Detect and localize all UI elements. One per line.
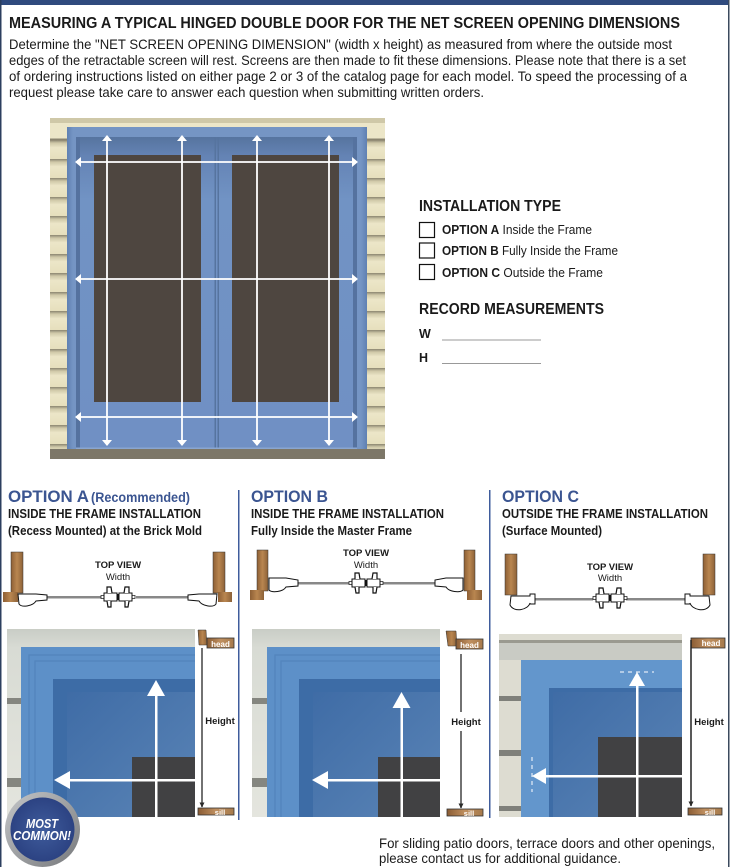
height field — [419, 351, 541, 365]
divider lines — [238, 490, 490, 820]
intro paragraph — [9, 36, 687, 100]
option B height measure: Height — [451, 717, 482, 728]
option B label: OPTION B Fully Inside the Frame — [442, 244, 618, 258]
option A white arrows — [54, 680, 195, 817]
option A height measure: Height — [205, 716, 236, 727]
option C height measure: head — [702, 639, 720, 648]
option B subheading — [251, 507, 444, 538]
option B top view diagram: TOP VIEW — [343, 548, 389, 559]
option C subheading: OUTSIDE THE FRAME INSTALLATION — [502, 507, 708, 521]
option A height measure: sill — [215, 808, 225, 817]
footer note: For sliding patio doors, terrace doors and other openings, — [379, 835, 715, 851]
option B height measure — [446, 631, 483, 818]
option B heading: OPTION B — [251, 488, 328, 506]
option B top view diagram: Width — [354, 560, 378, 571]
badge: most common: MOST — [26, 817, 59, 831]
door panels — [76, 137, 357, 449]
option A heading: OPTION A (Recommended) — [8, 488, 190, 506]
panel: option C — [499, 488, 725, 817]
option C subheading — [502, 507, 708, 538]
width field: W — [419, 327, 431, 341]
checkbox C — [420, 264, 434, 280]
footer note: please contact us for additional guidance. — [379, 850, 621, 866]
option B subheading: Fully Inside the Master Frame — [251, 524, 412, 538]
option C label: OPTION C Outside the Frame — [442, 266, 603, 280]
option C heading: OPTION C — [502, 488, 579, 506]
option A top view diagram: TOP VIEW — [95, 560, 141, 571]
option C top view diagram — [505, 554, 715, 610]
record measurements form — [419, 301, 604, 365]
door frame — [67, 127, 367, 449]
option C top view diagram: Width — [598, 573, 622, 584]
intro paragraph: Determine the "NET SCREEN OPENING DIMENSION" (width x height) as measured from where the outside most — [9, 36, 672, 52]
height field: H — [419, 351, 428, 365]
heading: installation type: INSTALLATION TYPE — [419, 198, 561, 215]
arrows — [75, 135, 358, 446]
footer note — [379, 835, 715, 866]
option A label: OPTION A Inside the Frame — [442, 223, 592, 237]
option B white arrows — [312, 692, 440, 817]
installation type form — [419, 198, 618, 280]
title: MEASURING A TYPICAL HINGED DOUBLE DOOR FOR THE NET SCREEN OPENING DIMENSIONS — [9, 15, 680, 32]
door photo with measurement arrows — [50, 118, 385, 459]
option B top view diagram — [250, 548, 482, 600]
option A top view diagram — [3, 552, 232, 607]
panel: option A — [3, 488, 236, 817]
option A height measure: head — [211, 640, 230, 649]
option C subheading: (Surface Mounted) — [502, 524, 602, 538]
option B subheading: INSIDE THE FRAME INSTALLATION — [251, 507, 444, 521]
option B photo — [252, 629, 440, 817]
option C height measure — [688, 638, 725, 817]
option A photo — [7, 629, 195, 817]
option A subheading — [8, 507, 202, 538]
option A top view diagram: Width — [106, 572, 130, 583]
panel: option B — [250, 488, 483, 818]
option A subheading: INSIDE THE FRAME INSTALLATION — [8, 507, 201, 521]
siding wall — [50, 118, 385, 449]
option A height measure — [198, 630, 236, 817]
option C white arrows — [532, 672, 682, 817]
left glass — [94, 155, 201, 402]
checkbox B — [420, 243, 434, 258]
option C height measure: Height — [694, 717, 725, 728]
option C height measure: sill — [705, 808, 715, 817]
right glass — [232, 155, 339, 402]
width field — [419, 327, 541, 341]
checkbox A — [420, 222, 434, 238]
intro paragraph: request please take care to answer each question when submitting written orders. — [9, 84, 484, 100]
option C top view diagram: TOP VIEW — [587, 562, 633, 573]
option C photo — [499, 634, 682, 817]
heading: record measurements: RECORD MEASUREMENTS — [419, 301, 604, 318]
intro paragraph: of ordering instructions listed on either page 2 or 3 of the catalog page for each model. To speed the processing of a — [9, 68, 687, 84]
option A subheading: (Recess Mounted) at the Brick Mold — [8, 524, 202, 538]
option B height measure: head — [460, 641, 479, 650]
badge: most common — [5, 792, 80, 867]
intro paragraph: edges of the retractable screen will rest. Screens are then made to fit these dimensions. Please note that there is a set — [9, 52, 686, 68]
option B height measure: sill — [464, 809, 474, 818]
ground strip — [50, 449, 385, 459]
badge: most common: COMMON! — [13, 829, 71, 843]
